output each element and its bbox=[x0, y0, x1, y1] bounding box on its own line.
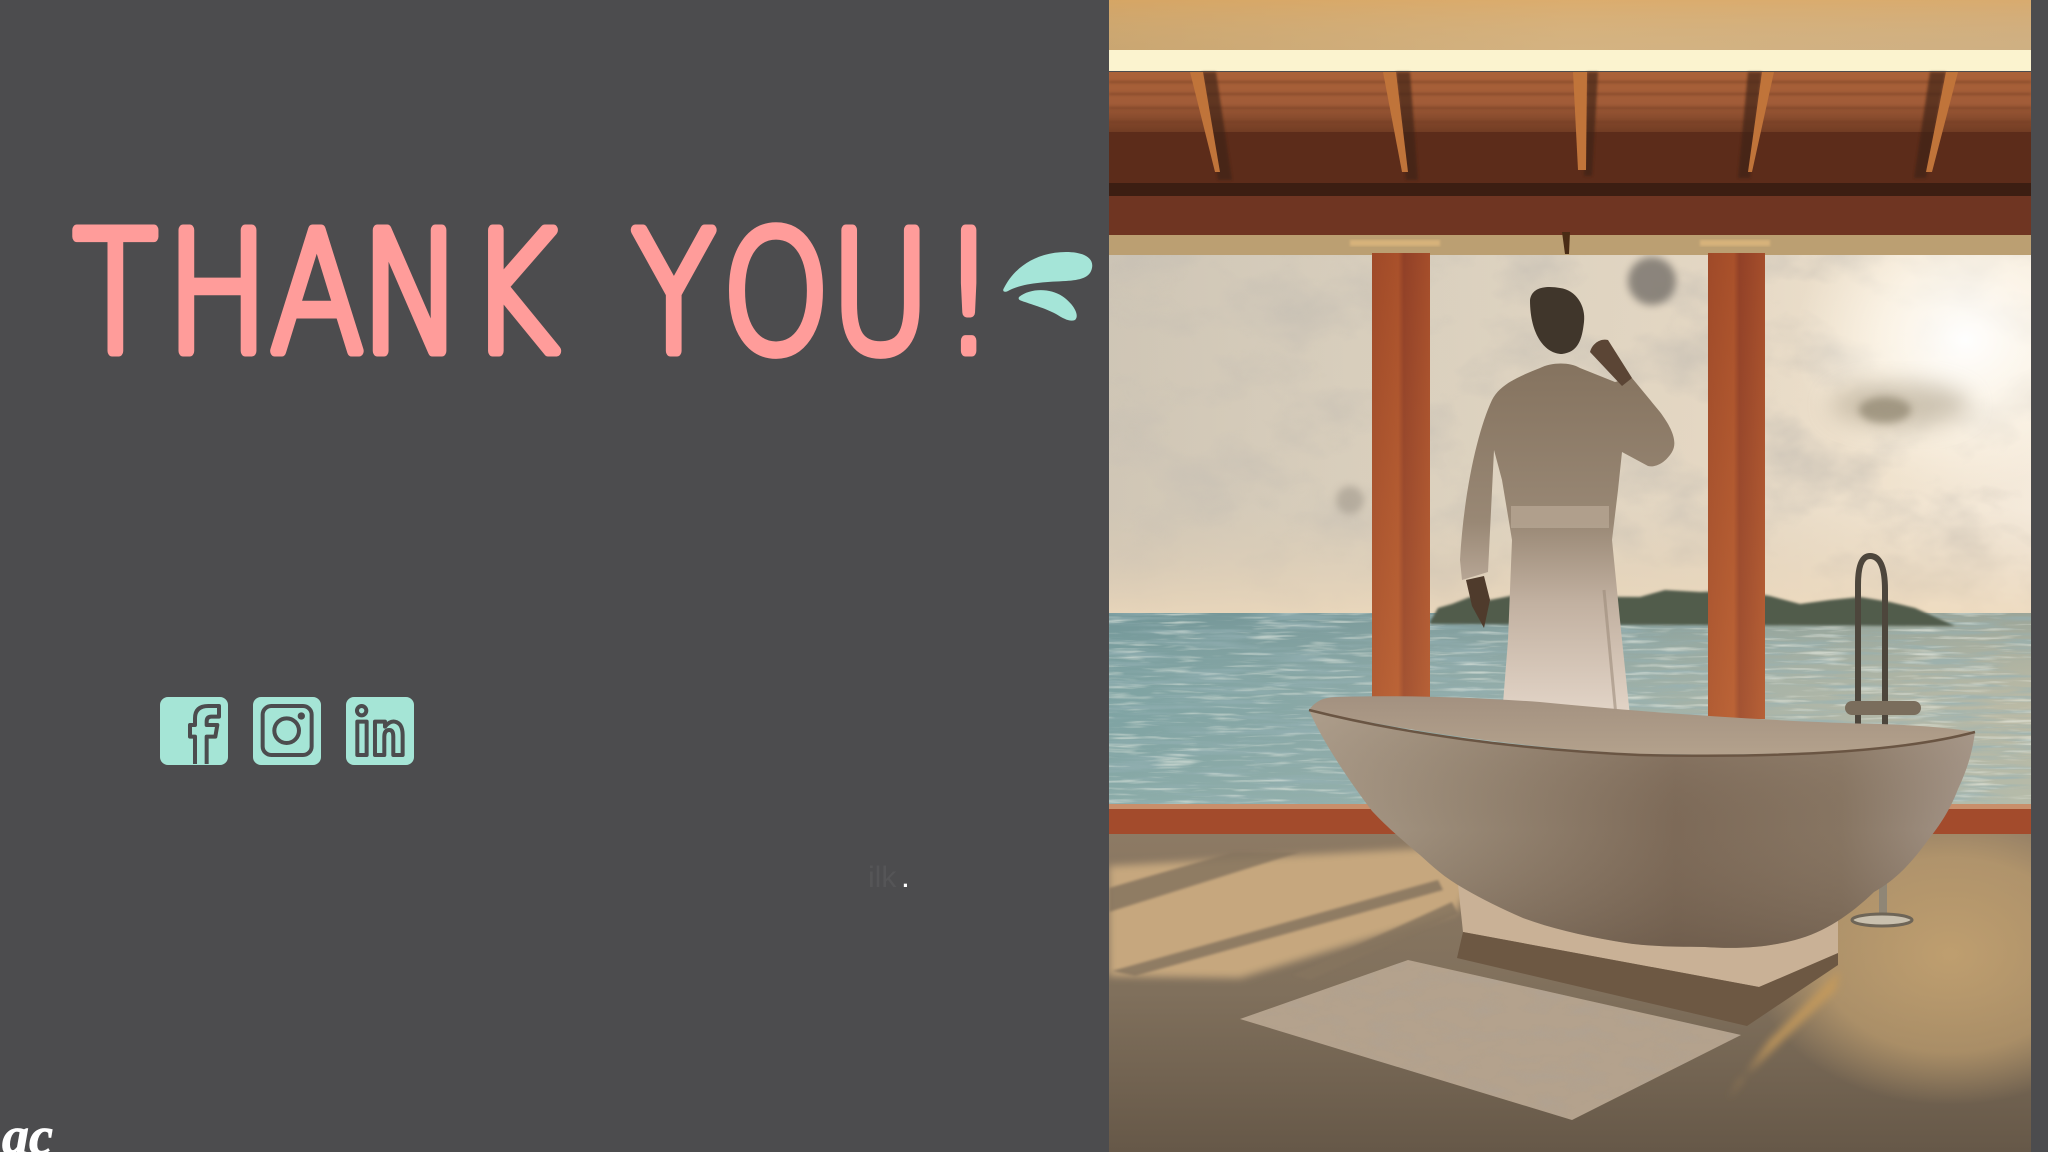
gold header rail bbox=[1109, 232, 2031, 255]
window sill bbox=[1109, 804, 2031, 834]
floor bbox=[1109, 834, 2031, 1152]
icon: splash droplets bbox=[1003, 252, 1092, 321]
island bbox=[1430, 590, 1955, 626]
icon: facebook bbox=[160, 697, 228, 765]
light strip bbox=[1109, 50, 2031, 71]
sea bbox=[1109, 613, 2031, 807]
dark beam bbox=[1109, 132, 2031, 235]
right edge strip bbox=[2031, 0, 2048, 1152]
ceiling bbox=[1109, 0, 2031, 50]
photo: man at window with bathtub bbox=[1109, 0, 2048, 1152]
bathtub bbox=[1309, 696, 1975, 948]
faucet bbox=[1852, 556, 1914, 926]
person in robe bbox=[1460, 287, 1674, 716]
floor shadows bbox=[1109, 852, 1458, 980]
icon: linkedin bbox=[346, 697, 414, 765]
title: thank you: THANK YOU! bbox=[74, 197, 996, 390]
bathmat bbox=[1240, 960, 1741, 1120]
icon: instagram bbox=[253, 697, 321, 765]
rafters bbox=[1190, 72, 1958, 180]
window pillars bbox=[1372, 253, 1765, 719]
sky with clouds bbox=[1109, 255, 2031, 613]
wooden ceiling boards bbox=[1109, 72, 2031, 134]
tub pedestal bbox=[1457, 875, 1838, 1026]
faint text mark: ilk . bbox=[868, 861, 908, 894]
